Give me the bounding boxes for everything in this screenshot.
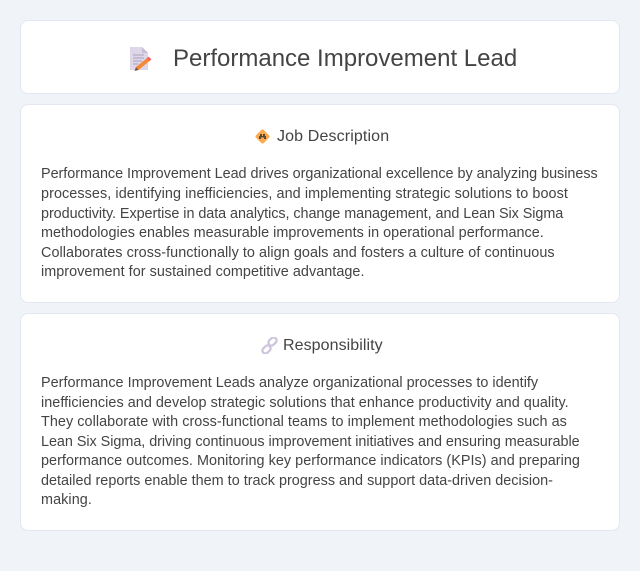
text block: responsibility: inefficiencies and develop strategic solutions that enhance productivity and quality. [41,395,569,411]
icon: chain link [261,337,278,354]
heading: responsibility: Responsibility [283,336,383,354]
text block: job description: Collaborates cross-functionally to align goals and fosters a culture of continuous [41,245,555,261]
panel: title card [20,20,620,94]
text block: responsibility: detailed reports enable them to track progress and support data-driven decision- [41,473,553,489]
text block: job description: processes, identifying inefficiencies, and implementing strategic solutions to boost [41,186,568,202]
text block: job description [41,166,598,280]
text block: responsibility: Performance Improvement Leads analyze organizational processes to identify [41,375,538,391]
text block: responsibility: They collaborate with cross-functional teams to implement methodologies such as [41,414,567,430]
panel: responsibility [20,313,620,531]
text block: responsibility: making. [41,492,92,508]
panel: job description [20,104,620,303]
icon: diamond sign [256,129,270,144]
text block: job description: methodologies enables measurable improvements in operational performance. [41,225,544,241]
text block: responsibility: performance outcomes. Monitoring key performance indicators (KPIs) and preparing [41,453,580,469]
heading: job description: Job Description [277,128,389,144]
icon: document with pencil [130,47,152,71]
text block: job description: improvement for sustained competitive advantage. [41,264,364,280]
text block: job description: productivity. Expertise in data analytics, change management, and Lean Six Sigma [41,206,563,222]
title: Performance Improvement Lead [173,45,517,72]
text block: responsibility [41,375,580,508]
text block: job description: Performance Improvement Lead drives organizational excellence by analyzing business [41,166,598,182]
text block: responsibility: Lean Six Sigma, driving continuous improvement initiatives and ensuring measurable [41,434,580,450]
